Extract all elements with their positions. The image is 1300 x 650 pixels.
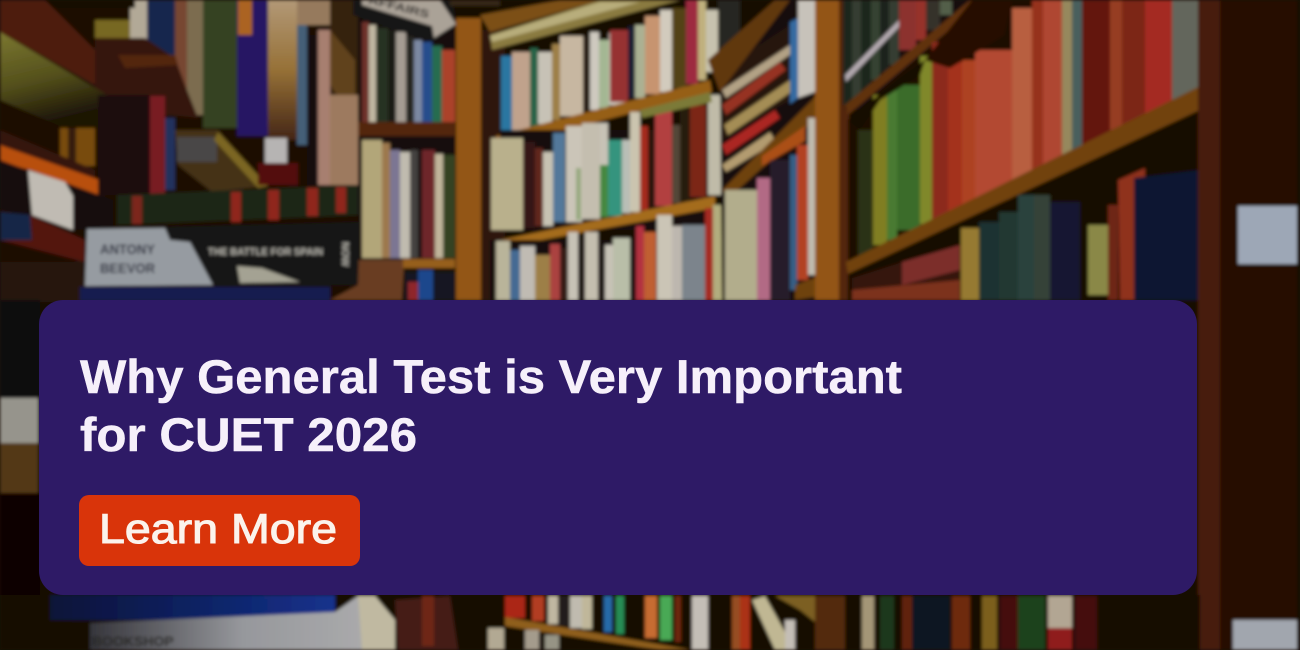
heading: article title: Why General Test is Very Important [80,350,902,403]
middle angled bookcase [708,0,820,300]
right bookcase: top shelf small books [843,0,985,115]
bottom strip of books [0,595,1200,650]
book: Antony Beevor, The Battle for Spain [80,222,360,301]
right bookcase: main shelf coloured spines [846,0,1200,274]
heading: article title [80,350,902,461]
bookcase post centre-right [815,0,849,300]
small shelves behind sign [358,15,455,300]
book: Antony Beevor, The Battle for Spain: THE BATTLE FOR SPAIN [208,246,323,258]
left margin beside panel [0,300,40,595]
centre shelf: lower row [490,205,725,300]
heading: article title: for CUET 2026 [80,408,417,461]
right bookcase: lower shelf dark books [848,110,1200,300]
left stack of books [0,0,412,302]
panel: purple banner [39,300,1197,595]
button: Learn More: Learn More [99,505,337,552]
centre shelf: upper row [450,0,740,142]
book: Antony Beevor, The Battle for Spain: BEEVOR [100,260,155,276]
book: Antony Beevor, The Battle for Spain: ANTONY [100,241,156,257]
button: Learn More [79,495,360,566]
sign: current affairs [353,0,457,42]
right wooden post and labels [1198,0,1300,650]
centre bookcase post [456,18,505,300]
centre shelf: middle row [491,92,722,246]
book: Antony Beevor, The Battle for Spain: NOW [339,242,350,267]
bottom strip of books: BOOKSHOP [92,633,174,649]
